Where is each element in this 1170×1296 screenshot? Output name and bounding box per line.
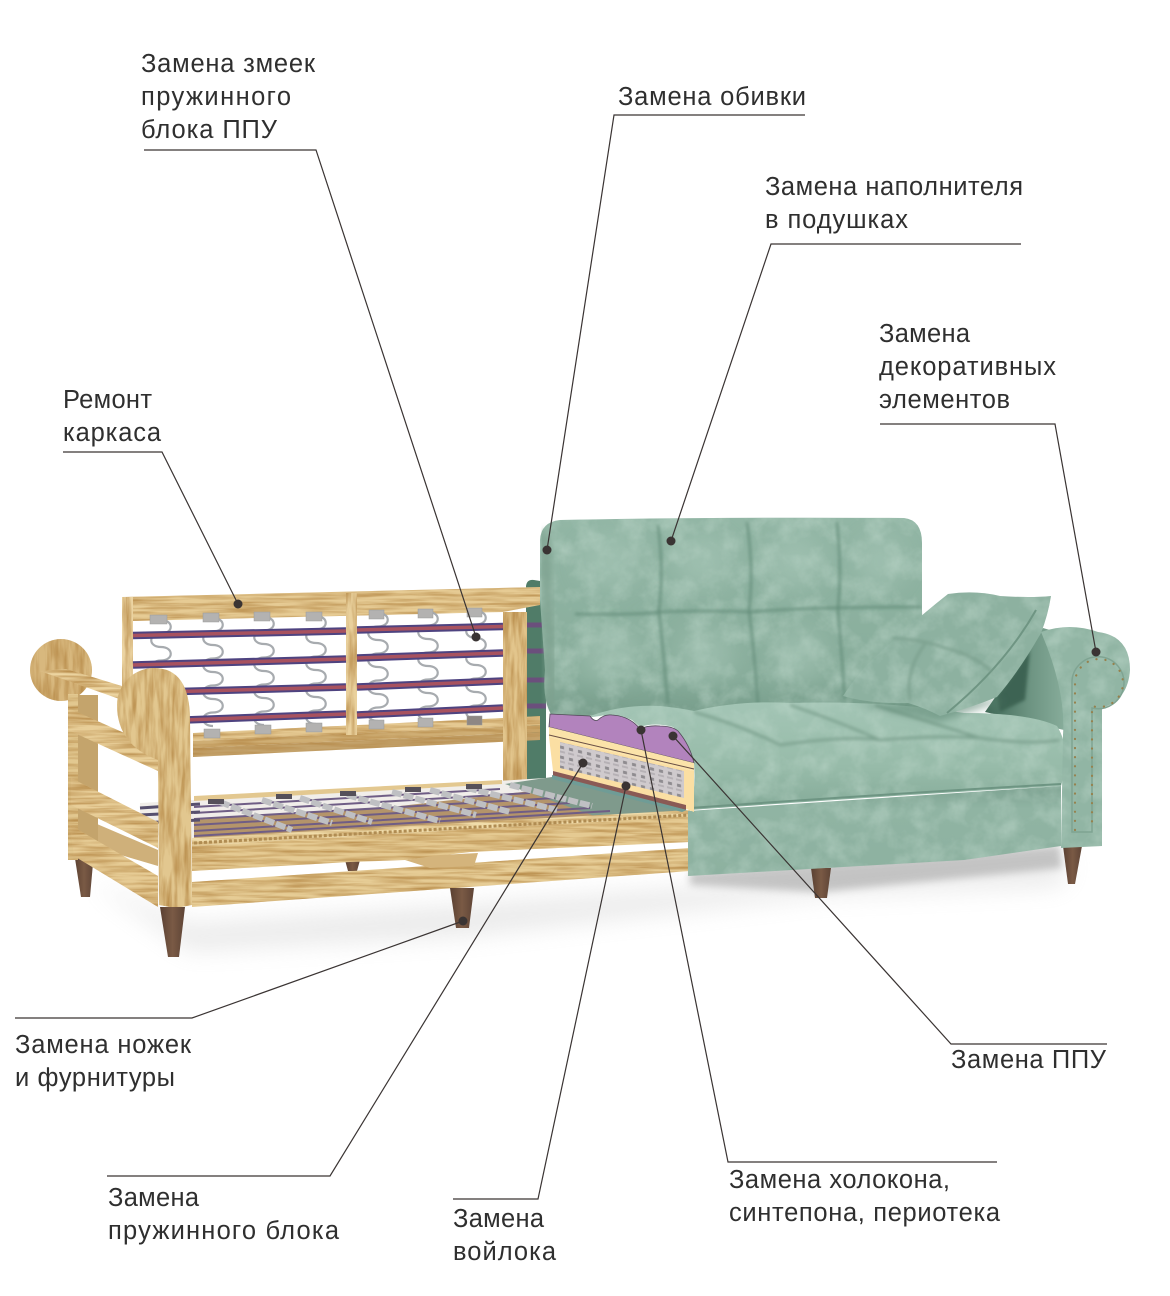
callout: spring block [107,758,588,1176]
label: upholstery: Замена обивки [618,83,806,111]
seat cushion [585,702,1066,810]
back springs [151,611,486,728]
callout: felt [453,782,630,1199]
cushion tuft creases [575,522,922,705]
label: legs: и фурнитуры [15,1064,175,1092]
label: decorative elements: Замена [879,320,971,348]
seat spring floor [140,777,692,842]
callout: legs [15,916,468,1018]
spring clips [150,608,482,738]
far arm top plank [40,669,135,860]
front rail grain strip [194,815,690,843]
callout: batting [636,726,997,1162]
ground shadow [90,845,1070,950]
side foam [549,737,694,812]
label: batting [729,1166,1001,1227]
pillow [843,592,1051,722]
callout: cushion filler [666,244,1021,546]
green back panel behind frame [526,580,546,782]
decorative nails [1075,659,1123,830]
back straps [133,626,503,720]
label: felt: Замена [453,1205,545,1233]
spring block [560,742,684,798]
far arm of frame [30,639,158,907]
label: batting: синтепона, периотека [729,1199,1001,1227]
green sofa [540,518,1130,876]
sofa base panel [688,786,1061,876]
label: batting: Замена холокона, [729,1166,950,1194]
inner arm and dark gap [985,628,1070,730]
label: springs snakes: пружинного [141,83,291,111]
callout lines and dots [15,115,1107,1199]
label: springs snakes [141,50,316,144]
label: cushion filler [765,173,1023,234]
center support block [405,853,478,868]
label: cushion filler: Замена наполнителя [765,173,1023,201]
cushion side shade [544,532,552,705]
label: felt: войлока [453,1238,557,1266]
purple foam layer [549,714,694,763]
cushion tuft highlights [575,522,922,705]
back frame with springs [122,587,540,782]
label: decorative elements: декоративных [879,353,1056,381]
label: legs [15,1031,192,1092]
label: decorative elements: элементов [879,386,1010,414]
label: frame repair: Ремонт [63,386,152,414]
label: felt [453,1205,557,1266]
back cushion [540,518,925,716]
back frame wood [122,587,540,757]
front legs [160,846,1082,957]
right arm front [1041,627,1130,848]
seat tuft creases [694,705,1060,745]
label: frame repair: каркаса [63,419,162,447]
callout: frame repair [63,452,242,608]
label: spring block: пружинного блока [108,1217,340,1245]
callout: foam [668,732,1107,1044]
label: foam: Замена ППУ [951,1046,1107,1074]
seat cutaway layers [549,714,694,812]
batting layer [549,727,694,771]
label: legs: Замена ножек [15,1031,192,1059]
label: frame repair [63,386,162,447]
teal tinted area under the cut seat [505,777,680,818]
arm rails [68,708,158,907]
label: springs snakes: Замена змеек [141,50,316,78]
callout: springs snakes [144,150,480,642]
callout: upholstery [542,115,805,554]
label: springs snakes: блока ППУ [141,116,278,144]
back frame posts [122,593,527,782]
far arm disc [30,639,92,701]
callout: decorative elements [880,424,1100,656]
felt layer [553,771,686,810]
label: spring block: Замена [108,1184,200,1212]
label: decorative elements [879,320,1056,414]
label: cushion filler: в подушках [765,206,908,234]
label: spring block [108,1184,340,1245]
pillow seams [947,610,1036,713]
near arm panel [117,668,192,908]
back legs of the frame [74,852,360,897]
front frame rails [192,810,690,907]
